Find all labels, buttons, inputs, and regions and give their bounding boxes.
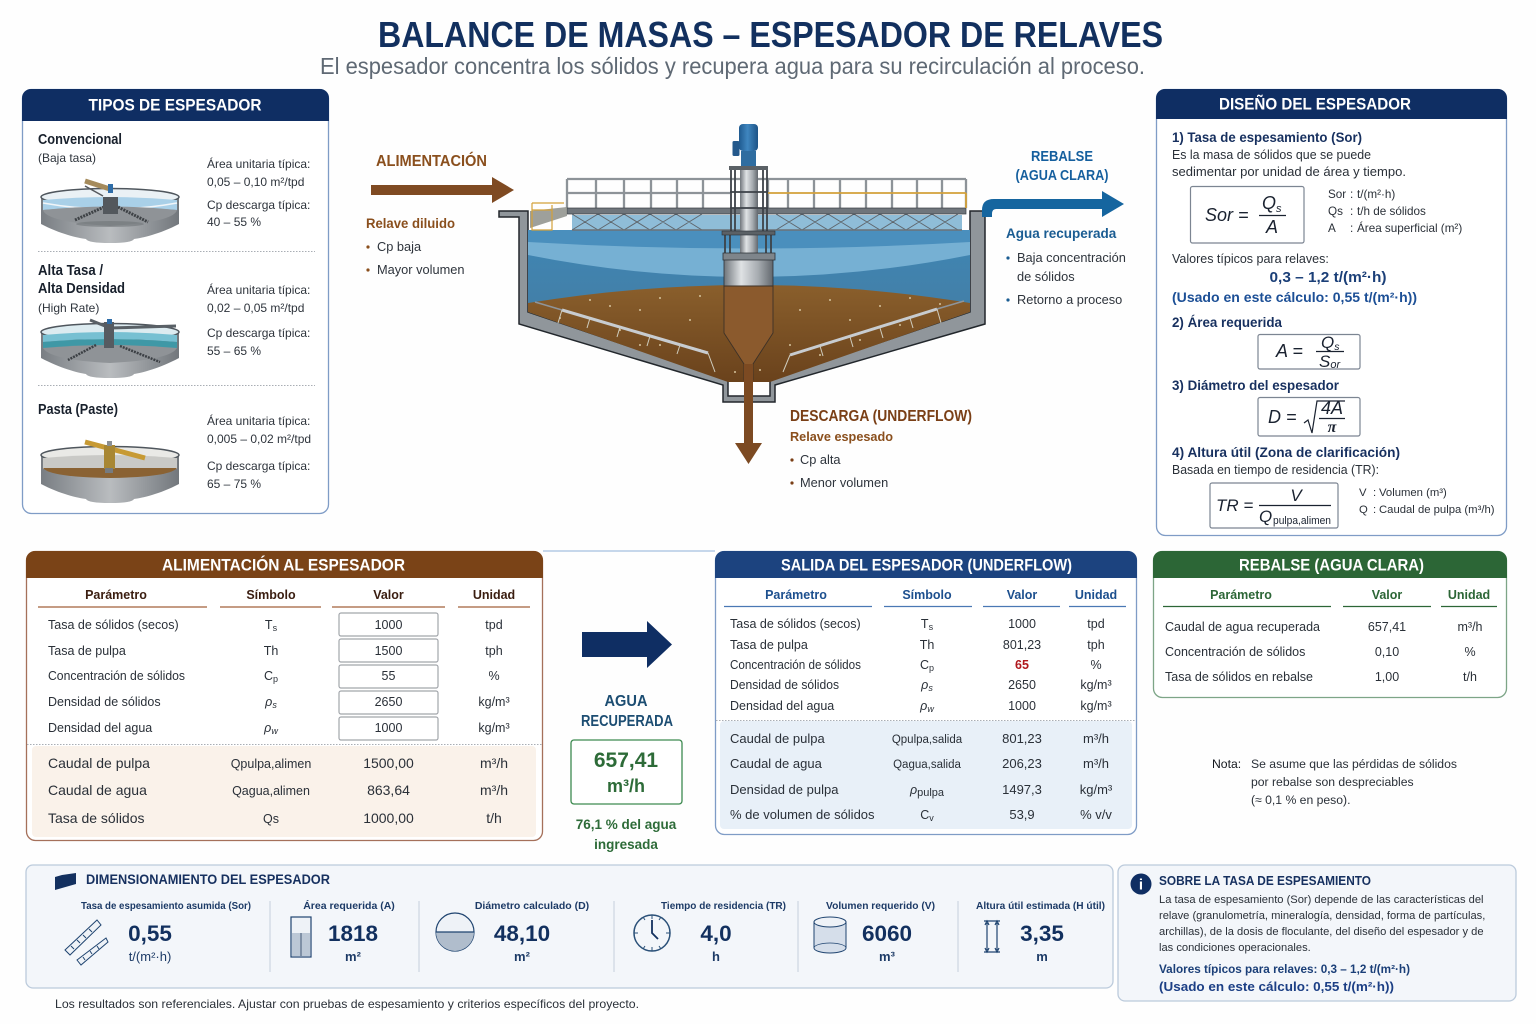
input rows: C bbox=[920, 658, 929, 672]
kpi: TR: 4,0 bbox=[700, 921, 732, 946]
kpi: diámetro: m² bbox=[514, 949, 531, 964]
text: descarga: Relave espesado bbox=[790, 429, 893, 444]
input rows: tph bbox=[1087, 638, 1105, 652]
panel: diseño del espesador bbox=[1156, 89, 1507, 536]
subtitle: El espesador concentra los sólidos y recupera agua para su recirculación al proceso. bbox=[320, 53, 1145, 79]
description: relave (granulometría, mineralogía, densidad, forma de partículas, bbox=[1159, 910, 1485, 922]
rows: m³/h bbox=[1458, 620, 1483, 634]
legend: TR: : bbox=[1373, 504, 1376, 516]
rows: 1,00 bbox=[1375, 670, 1399, 684]
input rows: Tasa de sólidos (secos) bbox=[730, 617, 861, 631]
result rows: v bbox=[929, 813, 934, 823]
kpi: TR bbox=[634, 900, 786, 964]
value box: agua recuperada: m³/h bbox=[607, 776, 645, 796]
kpi: altura: Altura útil estimada (H útil) bbox=[976, 900, 1105, 912]
result rows: Qpulpa,alimen bbox=[231, 757, 311, 771]
result rows bbox=[48, 755, 508, 826]
kpi: volumen bbox=[814, 900, 935, 964]
result rows bbox=[730, 731, 1113, 823]
panel: salida del espesador bbox=[715, 551, 1137, 834]
type: convencional: Cp descarga típica: bbox=[207, 198, 310, 212]
result rows: 1500,00 bbox=[363, 755, 414, 771]
legend: TR: Volumen (m³) bbox=[1379, 487, 1447, 499]
note bbox=[1212, 757, 1457, 807]
panel: dimensionamiento bbox=[26, 865, 1113, 988]
rows: 657,41 bbox=[1368, 620, 1406, 634]
kpi: volumen: Volumen requerido (V) bbox=[826, 900, 935, 912]
legend: Sor bbox=[1328, 188, 1462, 235]
kpi: área: 1818 bbox=[328, 921, 378, 946]
result rows: 1000,00 bbox=[363, 810, 414, 826]
table header: Unidad bbox=[1075, 588, 1117, 602]
text: porcentaje: 76,1 % del agua bbox=[576, 817, 677, 832]
text: descarga bbox=[790, 408, 972, 490]
input rows: 55 bbox=[382, 669, 395, 683]
kpi: TR: h bbox=[712, 949, 720, 964]
type: pasta: Pasta (Paste) bbox=[38, 402, 118, 418]
description bbox=[1159, 894, 1485, 954]
type: pasta: Área unitaria típica: bbox=[207, 413, 310, 428]
results background bbox=[32, 746, 536, 837]
icon: cylinder bbox=[814, 917, 846, 953]
input rows bbox=[730, 617, 1112, 714]
kpi: altura bbox=[976, 900, 1105, 964]
panel: alimentación al espesador bbox=[26, 551, 543, 840]
type: convencional bbox=[38, 132, 310, 229]
rows: Concentración de sólidos bbox=[1165, 645, 1305, 659]
label: rebalse: REBALSE bbox=[1031, 149, 1093, 165]
panel: rebalse bbox=[1153, 551, 1507, 698]
kpi: área bbox=[291, 899, 395, 964]
formula: diámetro: D = bbox=[1268, 407, 1297, 427]
text: porcentaje bbox=[576, 817, 677, 852]
formula: Sor: Q bbox=[1262, 193, 1276, 213]
text: porcentaje: ingresada bbox=[594, 837, 658, 852]
text: relave diluido bbox=[366, 216, 464, 277]
label: rebalse bbox=[1016, 149, 1109, 184]
heading: rebalse: REBALSE (AGUA CLARA) bbox=[1239, 556, 1424, 574]
label: agua recuperada: RECUPERADA bbox=[581, 713, 673, 730]
arrow: center flow bbox=[582, 621, 672, 668]
type: convencional: Área unitaria típica: bbox=[207, 156, 310, 171]
icon: thickener paste bbox=[41, 441, 179, 503]
kpi: volumen: m³ bbox=[879, 949, 896, 964]
result rows: m³/h bbox=[1083, 731, 1109, 746]
description: las condiciones operacionales. bbox=[1159, 942, 1311, 954]
typical values: (Usado en este cálculo: 0,55 t/(m²·h)) bbox=[1159, 979, 1394, 994]
text: agua recuperada: Agua recuperada bbox=[1006, 226, 1117, 241]
dividers bbox=[270, 901, 958, 972]
kpi: diámetro: 48,10 bbox=[494, 921, 550, 946]
result rows: 801,23 bbox=[1002, 731, 1042, 746]
result rows: m³/h bbox=[480, 755, 508, 771]
table header: Símbolo bbox=[246, 588, 296, 602]
rows: % bbox=[1464, 645, 1476, 659]
input rows: T bbox=[265, 618, 273, 632]
typical values: Valores típicos para relaves: 0,3 – 1,2 t/(m²·h) bbox=[1159, 964, 1410, 976]
formula: área: A = bbox=[1275, 341, 1303, 361]
heading: alimentación: ALIMENTACIÓN AL ESPESADOR bbox=[162, 556, 405, 574]
input rows: 1000 bbox=[375, 618, 402, 632]
legend: Sor: : bbox=[1350, 205, 1353, 218]
typical values: 0,3 – 1,2 t/(m²·h) bbox=[1270, 269, 1386, 286]
legend: Sor: Qs bbox=[1328, 205, 1343, 218]
underflow arrow bbox=[735, 364, 762, 464]
divider bbox=[38, 250, 315, 252]
formula: Sor: A bbox=[1265, 217, 1278, 237]
heading: tipos: TIPOS DE ESPESADOR bbox=[88, 96, 262, 114]
icon: thickener high rate bbox=[41, 319, 179, 378]
note: Nota: bbox=[1212, 757, 1241, 771]
type: alta tasa: Cp descarga típica: bbox=[207, 326, 310, 340]
table header: Valor bbox=[1372, 588, 1402, 602]
decorative connector bbox=[543, 550, 715, 552]
arrow: overflow bbox=[982, 191, 1124, 217]
label: rebalse: (AGUA CLARA) bbox=[1016, 168, 1109, 184]
table header bbox=[1163, 588, 1497, 606]
input rows: C bbox=[264, 669, 273, 683]
input rows: s bbox=[928, 683, 933, 693]
result rows: Caudal de agua bbox=[730, 756, 823, 771]
title: BALANCE DE MASAS – ESPESADOR DE RELAVES bbox=[378, 14, 1163, 55]
input rows: kg/m³ bbox=[478, 721, 510, 735]
text: agua recuperada: Baja concentración bbox=[1017, 250, 1126, 265]
legend: TR bbox=[1359, 487, 1495, 516]
input rows: tph bbox=[485, 644, 503, 658]
kpi: Sor bbox=[65, 900, 251, 965]
value box: agua recuperada bbox=[571, 740, 682, 804]
table header: Parámetro bbox=[85, 588, 147, 602]
input rows: Tasa de pulpa bbox=[48, 644, 126, 658]
icon: thickener conventional bbox=[41, 181, 179, 243]
section 1: tasa de espesamiento: Es la masa de sólidos que se puede bbox=[1172, 148, 1371, 162]
legend: TR: Q bbox=[1359, 504, 1368, 516]
formula: Sor bbox=[1190, 186, 1304, 243]
result rows: ρ bbox=[909, 783, 917, 797]
bridge truss bbox=[572, 214, 958, 230]
input rows: Th bbox=[920, 638, 934, 652]
type: alta tasa bbox=[38, 263, 310, 358]
result rows: 206,23 bbox=[1002, 756, 1042, 771]
kpi: altura: 3,35 bbox=[1020, 921, 1064, 946]
table header bbox=[38, 588, 530, 607]
table header: Parámetro bbox=[1210, 588, 1272, 602]
icon: height arrows bbox=[984, 921, 1000, 952]
result rows: Caudal de pulpa bbox=[48, 755, 150, 771]
description: La tasa de espesamiento (Sor) depende de las características del bbox=[1159, 894, 1484, 906]
input rows: 2650 bbox=[1008, 678, 1036, 692]
kpi: diámetro bbox=[436, 900, 589, 964]
input rows: 1000 bbox=[1008, 617, 1036, 631]
note: Se asume que las pérdidas de sólidos bbox=[1251, 757, 1457, 771]
section 1: tasa de espesamiento: 1) Tasa de espesamiento (Sor) bbox=[1172, 130, 1362, 145]
table header bbox=[724, 588, 1126, 606]
section 1: tasa de espesamiento: sedimentar por unidad de área y tiempo. bbox=[1172, 165, 1406, 179]
input rows: w bbox=[271, 726, 278, 736]
tank shell bbox=[499, 211, 985, 402]
legend: Sor: t/h de sólidos bbox=[1357, 205, 1426, 218]
type: pasta bbox=[38, 402, 311, 491]
note: por rebalse son despreciables bbox=[1251, 775, 1414, 789]
type: alta tasa: Alta Densidad bbox=[38, 281, 125, 297]
input rows: 801,23 bbox=[1003, 638, 1041, 652]
kpi: Sor: t/(m²·h) bbox=[129, 949, 171, 964]
input rows: Tasa de sólidos (secos) bbox=[48, 618, 179, 632]
type: alta tasa: Área unitaria típica: bbox=[207, 282, 310, 297]
result rows: pulpa bbox=[917, 787, 945, 799]
typical values bbox=[1159, 964, 1410, 994]
input rows: ρ bbox=[265, 695, 272, 709]
formula: TR: Q bbox=[1259, 507, 1272, 526]
kpi: TR: Tiempo de residencia (TR) bbox=[661, 900, 786, 912]
label: agua recuperada: AGUA bbox=[604, 693, 648, 710]
legend: TR: V bbox=[1359, 487, 1367, 499]
rows bbox=[1165, 620, 1483, 684]
section 2: área requerida: 2) Área requerida bbox=[1172, 315, 1282, 330]
input rows: T bbox=[921, 617, 929, 631]
result rows: Densidad de pulpa bbox=[730, 782, 839, 797]
table header: Parámetro bbox=[765, 588, 827, 602]
result rows: % v/v bbox=[1080, 807, 1112, 822]
input rows: % bbox=[1090, 658, 1102, 672]
section 4: altura útil bbox=[1172, 445, 1400, 477]
icon: blueprint bbox=[55, 873, 76, 890]
formula: área: Q bbox=[1321, 333, 1334, 352]
kpi: Sor: Tasa de espesamiento asumida (Sor) bbox=[81, 900, 251, 912]
motor bbox=[732, 124, 758, 166]
input rows: kg/m³ bbox=[478, 695, 510, 709]
legend: Sor: : bbox=[1350, 188, 1353, 201]
input rows: p bbox=[273, 674, 278, 684]
label: agua recuperada bbox=[581, 693, 673, 730]
input rows: s bbox=[929, 622, 934, 632]
result rows: Qagua,alimen bbox=[232, 784, 310, 798]
result rows: 53,9 bbox=[1009, 807, 1035, 822]
kpi: altura: m bbox=[1036, 949, 1048, 964]
formula: TR: pulpa,alimen bbox=[1273, 515, 1331, 527]
divider bbox=[38, 384, 315, 386]
input rows: ρ bbox=[920, 699, 927, 713]
input rows: kg/m³ bbox=[1080, 678, 1112, 692]
input rows: p bbox=[929, 663, 934, 673]
orange handrail bbox=[768, 193, 966, 208]
formula: TR: V bbox=[1290, 486, 1303, 505]
table header: Símbolo bbox=[902, 588, 952, 602]
panel: tipos de espesador bbox=[22, 89, 329, 514]
heading: sobre la tasa: SOBRE LA TASA DE ESPESAMIENTO bbox=[1159, 874, 1371, 888]
input rows: Densidad de sólidos bbox=[730, 678, 839, 692]
type: alta tasa: Alta Tasa / bbox=[38, 263, 103, 279]
typical values bbox=[1172, 252, 1417, 305]
panel: sobre la tasa bbox=[1118, 865, 1516, 1001]
text: descarga: Menor volumen bbox=[800, 475, 888, 490]
result rows: Tasa de sólidos bbox=[48, 810, 145, 826]
heading: diseño: DISEÑO DEL ESPESADOR bbox=[1219, 94, 1411, 114]
table header: Valor bbox=[1007, 588, 1037, 602]
result rows: C bbox=[920, 808, 929, 822]
input rows: Th bbox=[264, 644, 278, 658]
formula: área: s bbox=[1334, 341, 1340, 353]
type: convencional: 0,05 – 0,10 m²/tpd bbox=[207, 175, 304, 189]
legend: Sor: Sor bbox=[1328, 188, 1346, 201]
kpi: volumen: 6060 bbox=[862, 921, 912, 946]
note: (≈ 0,1 % en peso). bbox=[1251, 793, 1350, 807]
text: relave diluido: Mayor volumen bbox=[377, 262, 464, 277]
type: alta tasa: 0,02 – 0,05 m²/tpd bbox=[207, 301, 304, 315]
formula: Sor: Sor = bbox=[1205, 205, 1249, 225]
kpi: diámetro: Diámetro calculado (D) bbox=[475, 900, 589, 912]
input rows: ρ bbox=[921, 678, 928, 692]
input rows: Densidad del agua bbox=[730, 699, 834, 713]
result rows: Qagua,salida bbox=[893, 759, 961, 771]
illustration: thickener tank bbox=[499, 124, 985, 464]
input rows: % bbox=[488, 669, 500, 683]
legend: TR: : bbox=[1373, 487, 1376, 499]
legend: TR: Caudal de pulpa (m³/h) bbox=[1379, 504, 1495, 516]
input rows: 2650 bbox=[375, 695, 402, 709]
input rows: s bbox=[273, 623, 278, 633]
formula: diámetro: 4A bbox=[1321, 398, 1343, 418]
formula: diámetro: π bbox=[1328, 419, 1338, 436]
bridge railing bbox=[567, 179, 966, 208]
input rows: Densidad del agua bbox=[48, 721, 152, 735]
text: relave diluido: Relave diluido bbox=[366, 216, 455, 231]
icon: info: i bbox=[1139, 876, 1143, 894]
icon: area tank bbox=[291, 917, 311, 957]
input boxes bbox=[339, 613, 438, 740]
description: archillas), de la dosis de floculante, del diseño del espesador y de bbox=[1159, 926, 1484, 938]
section 3: diámetro: 3) Diámetro del espesador bbox=[1172, 378, 1340, 393]
rows: Tasa de sólidos en rebalse bbox=[1165, 670, 1313, 684]
result rows: 863,64 bbox=[367, 782, 410, 798]
input rows bbox=[48, 618, 510, 736]
kpi: área: Área requerida (A) bbox=[303, 899, 395, 912]
legend: Sor: Área superficial (m²) bbox=[1357, 222, 1462, 235]
type: pasta: Cp descarga típica: bbox=[207, 459, 310, 473]
formula: área: S bbox=[1319, 352, 1330, 371]
formula: área: or bbox=[1330, 359, 1341, 371]
formula: Sor: s bbox=[1276, 203, 1282, 215]
heading: salida: SALIDA DEL ESPESADOR (UNDERFLOW) bbox=[781, 556, 1072, 574]
heading: dimensionamiento: DIMENSIONAMIENTO DEL ESPESADOR bbox=[86, 872, 330, 887]
type: convencional: 40 – 55 % bbox=[207, 215, 261, 229]
formula: área bbox=[1258, 333, 1360, 371]
result rows: % de volumen de sólidos bbox=[730, 807, 875, 822]
central shaft bbox=[740, 168, 758, 258]
text: descarga: DESCARGA (UNDERFLOW) bbox=[790, 408, 972, 425]
input rows: 65 bbox=[1015, 658, 1029, 672]
label: alimentación: ALIMENTACIÓN bbox=[376, 152, 487, 170]
feed launder bbox=[530, 207, 567, 228]
input rows: 1500 bbox=[375, 644, 402, 658]
type: alta tasa: 55 – 65 % bbox=[207, 344, 261, 358]
section 4: altura útil: 4) Altura útil (Zona de clarificación) bbox=[1172, 445, 1400, 460]
section 1: tasa de espesamiento bbox=[1172, 130, 1406, 179]
drive frame bbox=[725, 168, 771, 255]
typical values: Valores típicos para relaves: bbox=[1172, 252, 1329, 266]
text: agua recuperada: Retorno a proceso bbox=[1017, 292, 1122, 307]
table header: Valor bbox=[373, 588, 404, 602]
kpi: Sor: 0,55 bbox=[128, 921, 172, 946]
input rows: Concentración de sólidos bbox=[730, 658, 861, 672]
results background bbox=[720, 721, 1132, 829]
result rows: m³/h bbox=[1083, 756, 1109, 771]
rows: 0,10 bbox=[1375, 645, 1399, 659]
section 4: altura útil: Basada en tiempo de residencia (TR): bbox=[1172, 463, 1379, 477]
input rows: s bbox=[272, 700, 277, 710]
icon: info bbox=[1130, 874, 1152, 894]
formula: TR: TR = bbox=[1216, 496, 1253, 515]
input rows: 1000 bbox=[375, 721, 402, 735]
type: pasta: 65 – 75 % bbox=[207, 477, 261, 491]
input rows: w bbox=[927, 704, 934, 714]
kpi: área: m² bbox=[345, 949, 362, 964]
input rows: 1000 bbox=[1008, 699, 1036, 713]
table header: Unidad bbox=[473, 588, 515, 602]
result rows: Qs bbox=[263, 812, 279, 826]
sludge bbox=[528, 285, 970, 382]
result rows: kg/m³ bbox=[1080, 782, 1113, 797]
arrow: feed bbox=[371, 177, 514, 203]
input rows: kg/m³ bbox=[1080, 699, 1112, 713]
result rows: Caudal de pulpa bbox=[730, 731, 825, 746]
value box: agua recuperada: 657,41 bbox=[594, 749, 658, 772]
input rows: tpd bbox=[1087, 617, 1105, 631]
result rows: 1497,3 bbox=[1002, 782, 1042, 797]
text: descarga: Cp alta bbox=[800, 452, 841, 467]
table header: Unidad bbox=[1448, 588, 1490, 602]
result rows: Qpulpa,salida bbox=[892, 734, 963, 746]
text: agua recuperada: de sólidos bbox=[1017, 269, 1075, 284]
icon: diameter circle bbox=[436, 913, 474, 951]
icon: rulers bbox=[65, 920, 108, 965]
typical values: (Usado en este cálculo: 0,55 t/(m²·h)) bbox=[1172, 290, 1417, 305]
result rows: t/h bbox=[486, 810, 502, 826]
text: relave diluido: Cp baja bbox=[377, 239, 422, 254]
water bbox=[528, 230, 970, 380]
type: convencional: (Baja tasa) bbox=[38, 151, 96, 165]
legend: Sor: A bbox=[1328, 222, 1336, 235]
bridge deck bbox=[567, 208, 966, 214]
formula: diámetro bbox=[1258, 398, 1360, 436]
input rows: Concentración de sólidos bbox=[48, 669, 185, 683]
rows: Caudal de agua recuperada bbox=[1165, 620, 1320, 634]
rows: t/h bbox=[1463, 670, 1477, 684]
type: pasta: 0,005 – 0,02 m²/tpd bbox=[207, 432, 311, 446]
input rows: Tasa de pulpa bbox=[730, 638, 808, 652]
footer note: Los resultados son referenciales. Ajustar con pruebas de espesamiento y criterios específicos del proyecto. bbox=[55, 997, 639, 1011]
icon: clock bbox=[634, 915, 670, 951]
input rows: Densidad de sólidos bbox=[48, 695, 161, 709]
sludge particles bbox=[559, 295, 941, 373]
rake arms bbox=[535, 301, 964, 372]
type: alta tasa: (High Rate) bbox=[38, 301, 99, 315]
result rows: Caudal de agua bbox=[48, 782, 147, 798]
legend: Sor: : bbox=[1350, 222, 1353, 235]
text: agua recuperada bbox=[1006, 226, 1126, 307]
input rows: ρ bbox=[264, 721, 271, 735]
formula: TR bbox=[1210, 483, 1338, 528]
result rows: m³/h bbox=[480, 782, 508, 798]
type: convencional: Convencional bbox=[38, 132, 122, 148]
feedwell bbox=[724, 257, 773, 287]
legend: Sor: t/(m²·h) bbox=[1357, 188, 1395, 201]
input rows: tpd bbox=[485, 618, 503, 632]
